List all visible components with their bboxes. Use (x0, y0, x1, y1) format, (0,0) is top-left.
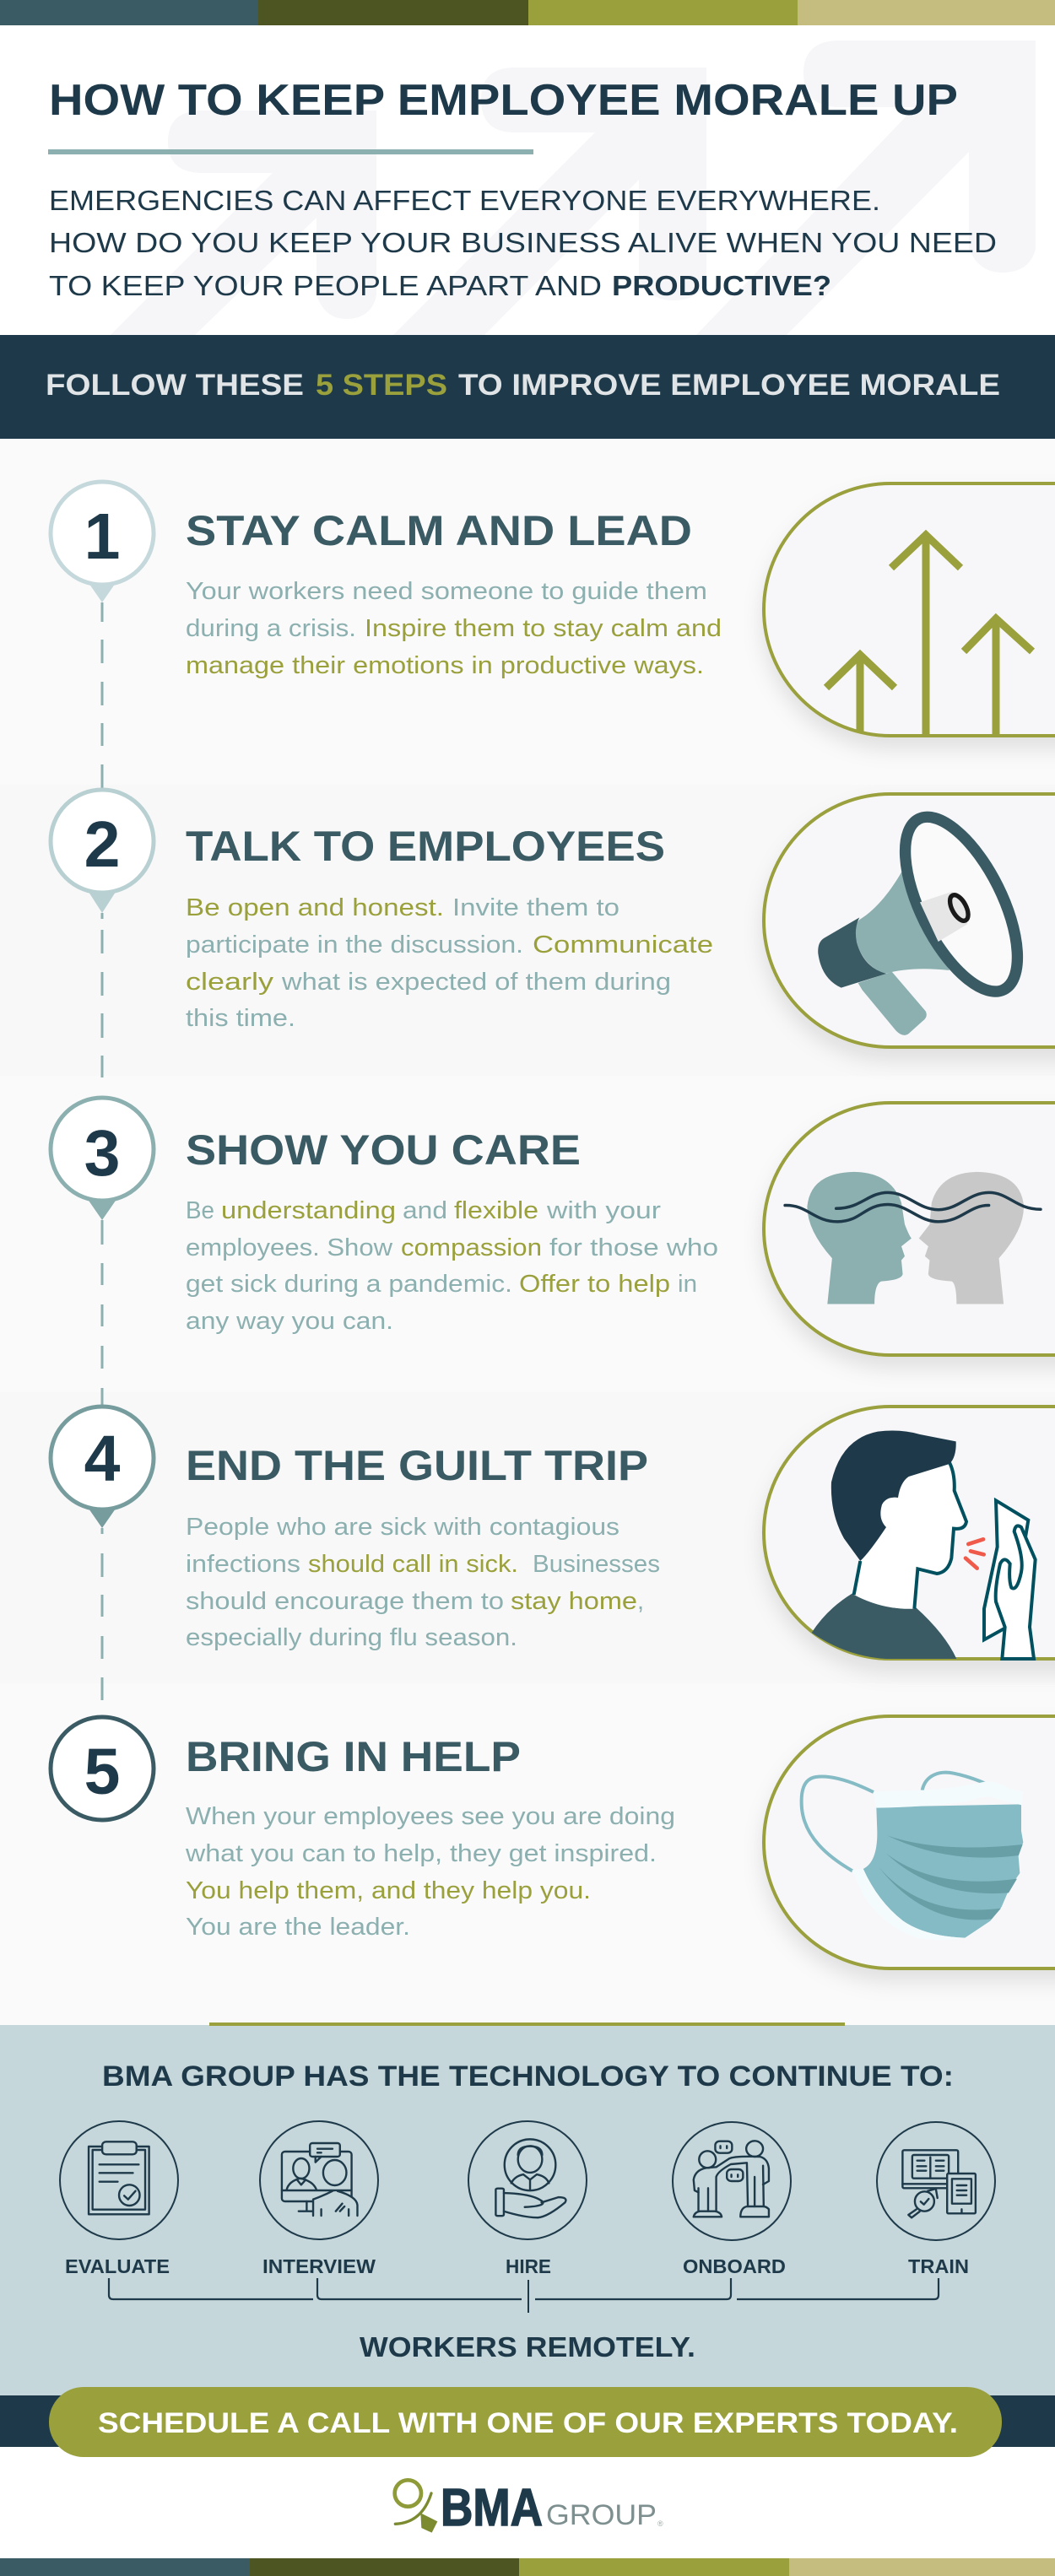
step 1 body: Your workers need someone to guide them (186, 578, 707, 605)
title: HOW TO KEEP EMPLOYEE MORALE UP (49, 76, 958, 125)
intro text: HOW DO YOU KEEP YOUR BUSINESS ALIVE WHEN YOU NEED (49, 228, 997, 259)
labels: HIRE (506, 2255, 551, 2277)
step 5 pill: face mask (764, 1716, 1055, 1968)
icon: hire person in hand (468, 2121, 587, 2239)
step 4 pill: man sneezing into tissue (764, 1407, 1055, 1659)
step 1 body: manage their emotions in productive ways. (186, 652, 704, 679)
logo: ® (657, 2519, 663, 2528)
step 2 heading: TALK TO EMPLOYEES (186, 823, 665, 870)
step 5 body (185, 1803, 675, 1941)
step 4 body: should call in sick. (308, 1551, 518, 1578)
labels (65, 2255, 969, 2277)
step 3 body: flexible (454, 1197, 538, 1224)
step 5 heading: BRING IN HELP (186, 1733, 521, 1780)
bottom colour bar (0, 2558, 1055, 2576)
step 4 body: infections (186, 1551, 300, 1578)
step 4 marker: 4 (84, 1423, 121, 1495)
step 4 marker (51, 1407, 154, 1700)
step 3 body: employees. Show (186, 1234, 393, 1261)
icon: onboard two people talking (673, 2122, 791, 2240)
icon: interview video call (260, 2121, 378, 2239)
icon: train book, tablet and magnifier (877, 2122, 995, 2240)
step 1 body (186, 578, 722, 679)
step 4 body: People who are sick with contagious (186, 1514, 619, 1541)
step 3 body: Be (186, 1197, 214, 1224)
step 5 body: When your employees see you are doing (186, 1803, 675, 1830)
step 3 body: any way you can. (186, 1308, 393, 1335)
intro text: TO KEEP YOUR PEOPLE APART AND (49, 271, 602, 302)
step 3 marker: 3 (84, 1117, 120, 1190)
step 4 body: , (637, 1588, 644, 1615)
step 2 body: Invite them to (452, 894, 619, 921)
step 1 body: during a crisis. (186, 615, 356, 642)
intro text (49, 186, 997, 302)
steps background bands (0, 439, 1055, 2025)
banner: FOLLOW THESE (46, 369, 304, 402)
intro text: EMERGENCIES CAN AFFECT EVERYONE EVERYWHERE. (49, 186, 880, 217)
step 5 body: You help them, and they help you. (186, 1877, 591, 1904)
call to action: SCHEDULE A CALL WITH ONE OF OUR EXPERTS TODAY. (98, 2407, 958, 2439)
step 3 body: and (403, 1197, 447, 1224)
labels: EVALUATE (65, 2255, 170, 2277)
step 3 body: understanding (221, 1197, 396, 1224)
step 2 (51, 790, 1055, 1077)
step 4 body: should encourage them to (186, 1588, 504, 1615)
step 2 body: Be open and honest. (186, 894, 444, 921)
step 1 heading: STAY CALM AND LEAD (186, 507, 692, 554)
closing line: WORKERS REMOTELY. (360, 2331, 695, 2363)
bracket connecting the steps (109, 2278, 939, 2313)
step 5 body: You are the leader. (186, 1914, 410, 1941)
intro text: PRODUCTIVE? (612, 271, 831, 302)
step 2 marker (51, 790, 154, 1077)
top colour bar (0, 0, 1055, 25)
logo mark: magnifier (395, 2480, 437, 2533)
banner (0, 335, 1055, 439)
step 3 heading: SHOW YOU CARE (186, 1126, 581, 1174)
logo (395, 2479, 663, 2537)
step 1 marker: 1 (84, 500, 120, 573)
step 2 body (186, 894, 713, 1032)
step 5 marker: 5 (84, 1736, 120, 1808)
step 2 body: what is expected of them during (281, 969, 671, 996)
step 3 body: get sick during a pandemic. (186, 1271, 512, 1298)
step 2 body: clearly (186, 969, 274, 996)
step 1 pill: arrows (764, 483, 1055, 736)
step 4 body: stay home (511, 1588, 637, 1615)
step 4 body (186, 1514, 660, 1651)
technology heading: BMA GROUP HAS THE TECHNOLOGY TO CONTINUE TO: (102, 2060, 954, 2093)
background arrows (111, 41, 1036, 335)
banner: TO IMPROVE EMPLOYEE MORALE (458, 369, 1000, 402)
logo: GROUP (546, 2499, 657, 2531)
step 2 body: this time. (186, 1005, 295, 1032)
step 5 marker (51, 1717, 154, 1820)
step 5 (51, 1716, 1055, 1968)
step 3 body: in (678, 1271, 697, 1298)
step 3 pill: two heads (764, 1103, 1055, 1355)
step 1 marker (51, 482, 154, 788)
step 2 body: participate in the discussion. (186, 932, 523, 959)
labels: ONBOARD (683, 2255, 786, 2277)
step 4 (51, 1407, 1055, 1700)
step 3 body (186, 1197, 718, 1335)
step 3 (51, 1098, 1055, 1405)
step 3 body: with your (546, 1197, 661, 1224)
labels: INTERVIEW (262, 2255, 376, 2277)
step 3 body: for those who (549, 1234, 718, 1261)
technology panel (0, 2022, 1055, 2396)
step 1 body: Inspire them to stay calm and (365, 615, 722, 642)
logo: BMA (441, 2479, 543, 2537)
icon: evaluate clipboard (60, 2121, 178, 2239)
step 2 body: Communicate (533, 932, 713, 959)
labels: TRAIN (908, 2255, 969, 2277)
banner: 5 STEPS (316, 369, 447, 402)
step 1 (51, 482, 1055, 788)
step 3 marker (51, 1098, 154, 1405)
step 4 body: especially during flu season. (186, 1624, 517, 1651)
step 4 heading: END THE GUILT TRIP (186, 1442, 648, 1489)
step 2 pill: megaphone (764, 794, 1055, 1047)
step 5 body: what you can to help, they get inspired. (185, 1840, 657, 1867)
step 4 body: Businesses (533, 1551, 660, 1578)
step 3 body: Offer to help (519, 1271, 670, 1298)
step 3 body: compassion (401, 1234, 542, 1261)
call to action (0, 2387, 1055, 2457)
step 2 marker: 2 (84, 808, 120, 881)
